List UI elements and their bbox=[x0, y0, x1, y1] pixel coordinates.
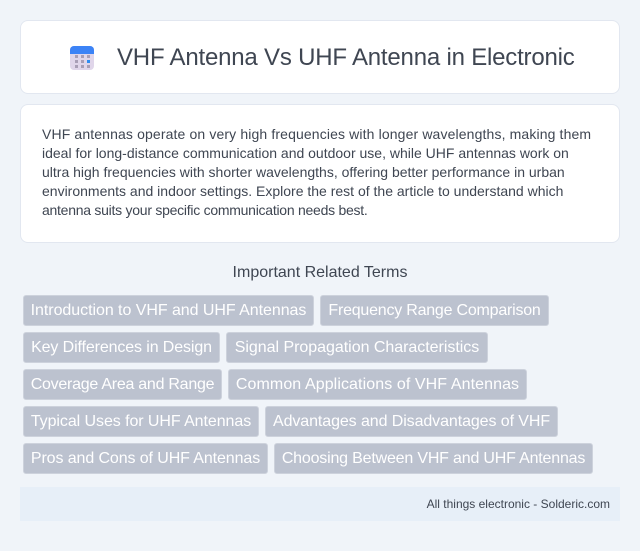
chip bbox=[23, 295, 314, 326]
panel: title card bbox=[20, 20, 620, 94]
footer credit: All things electronic - Solderic.com bbox=[427, 497, 610, 511]
chip: Advantages and Disadvantages of VHF bbox=[273, 413, 550, 430]
summary line 2: ideal for long-distance communication and outdoor use, while UHF antennas work on bbox=[42, 145, 569, 161]
panel: summary text card bbox=[20, 104, 620, 243]
chip bbox=[265, 406, 558, 437]
summary line 5: antenna suits your specific communication needs best. bbox=[42, 202, 368, 218]
footer bar bbox=[20, 487, 620, 521]
chip: Frequency Range Comparison bbox=[328, 302, 541, 319]
chip: Choosing Between VHF and UHF Antennas bbox=[282, 450, 585, 467]
summary line 1: VHF antennas operate on very high frequencies with longer wavelengths, making them bbox=[42, 126, 591, 142]
chip bbox=[23, 332, 220, 363]
chip bbox=[226, 332, 488, 363]
chip: Pros and Cons of UHF Antennas bbox=[31, 450, 260, 467]
chip bbox=[320, 295, 549, 326]
chip: Introduction to VHF and UHF Antennas bbox=[31, 302, 306, 319]
chip: Common Applications of VHF Antennas bbox=[236, 376, 519, 393]
panel: related terms chips bbox=[23, 295, 593, 474]
chip: Typical Uses for UHF Antennas bbox=[31, 413, 251, 430]
chip bbox=[23, 406, 259, 437]
heading: important related terms: Important Related Terms bbox=[233, 264, 407, 281]
chip bbox=[228, 369, 527, 400]
chip: Coverage Area and Range bbox=[31, 376, 214, 393]
chip: Signal Propagation Characteristics bbox=[235, 339, 479, 356]
summary line 3: ultra high frequencies with shorter wavelengths, offering better performance in urban bbox=[42, 164, 565, 180]
title: VHF Antenna Vs UHF Antenna in Electronic bbox=[117, 44, 575, 71]
icon: calendar grid bbox=[70, 46, 94, 70]
chip bbox=[23, 443, 268, 474]
chip bbox=[274, 443, 593, 474]
chip bbox=[23, 369, 222, 400]
chip: Key Differences in Design bbox=[31, 339, 212, 356]
summary line 4: environments and indoor settings. Explore the rest of the article to understand which bbox=[42, 183, 563, 199]
